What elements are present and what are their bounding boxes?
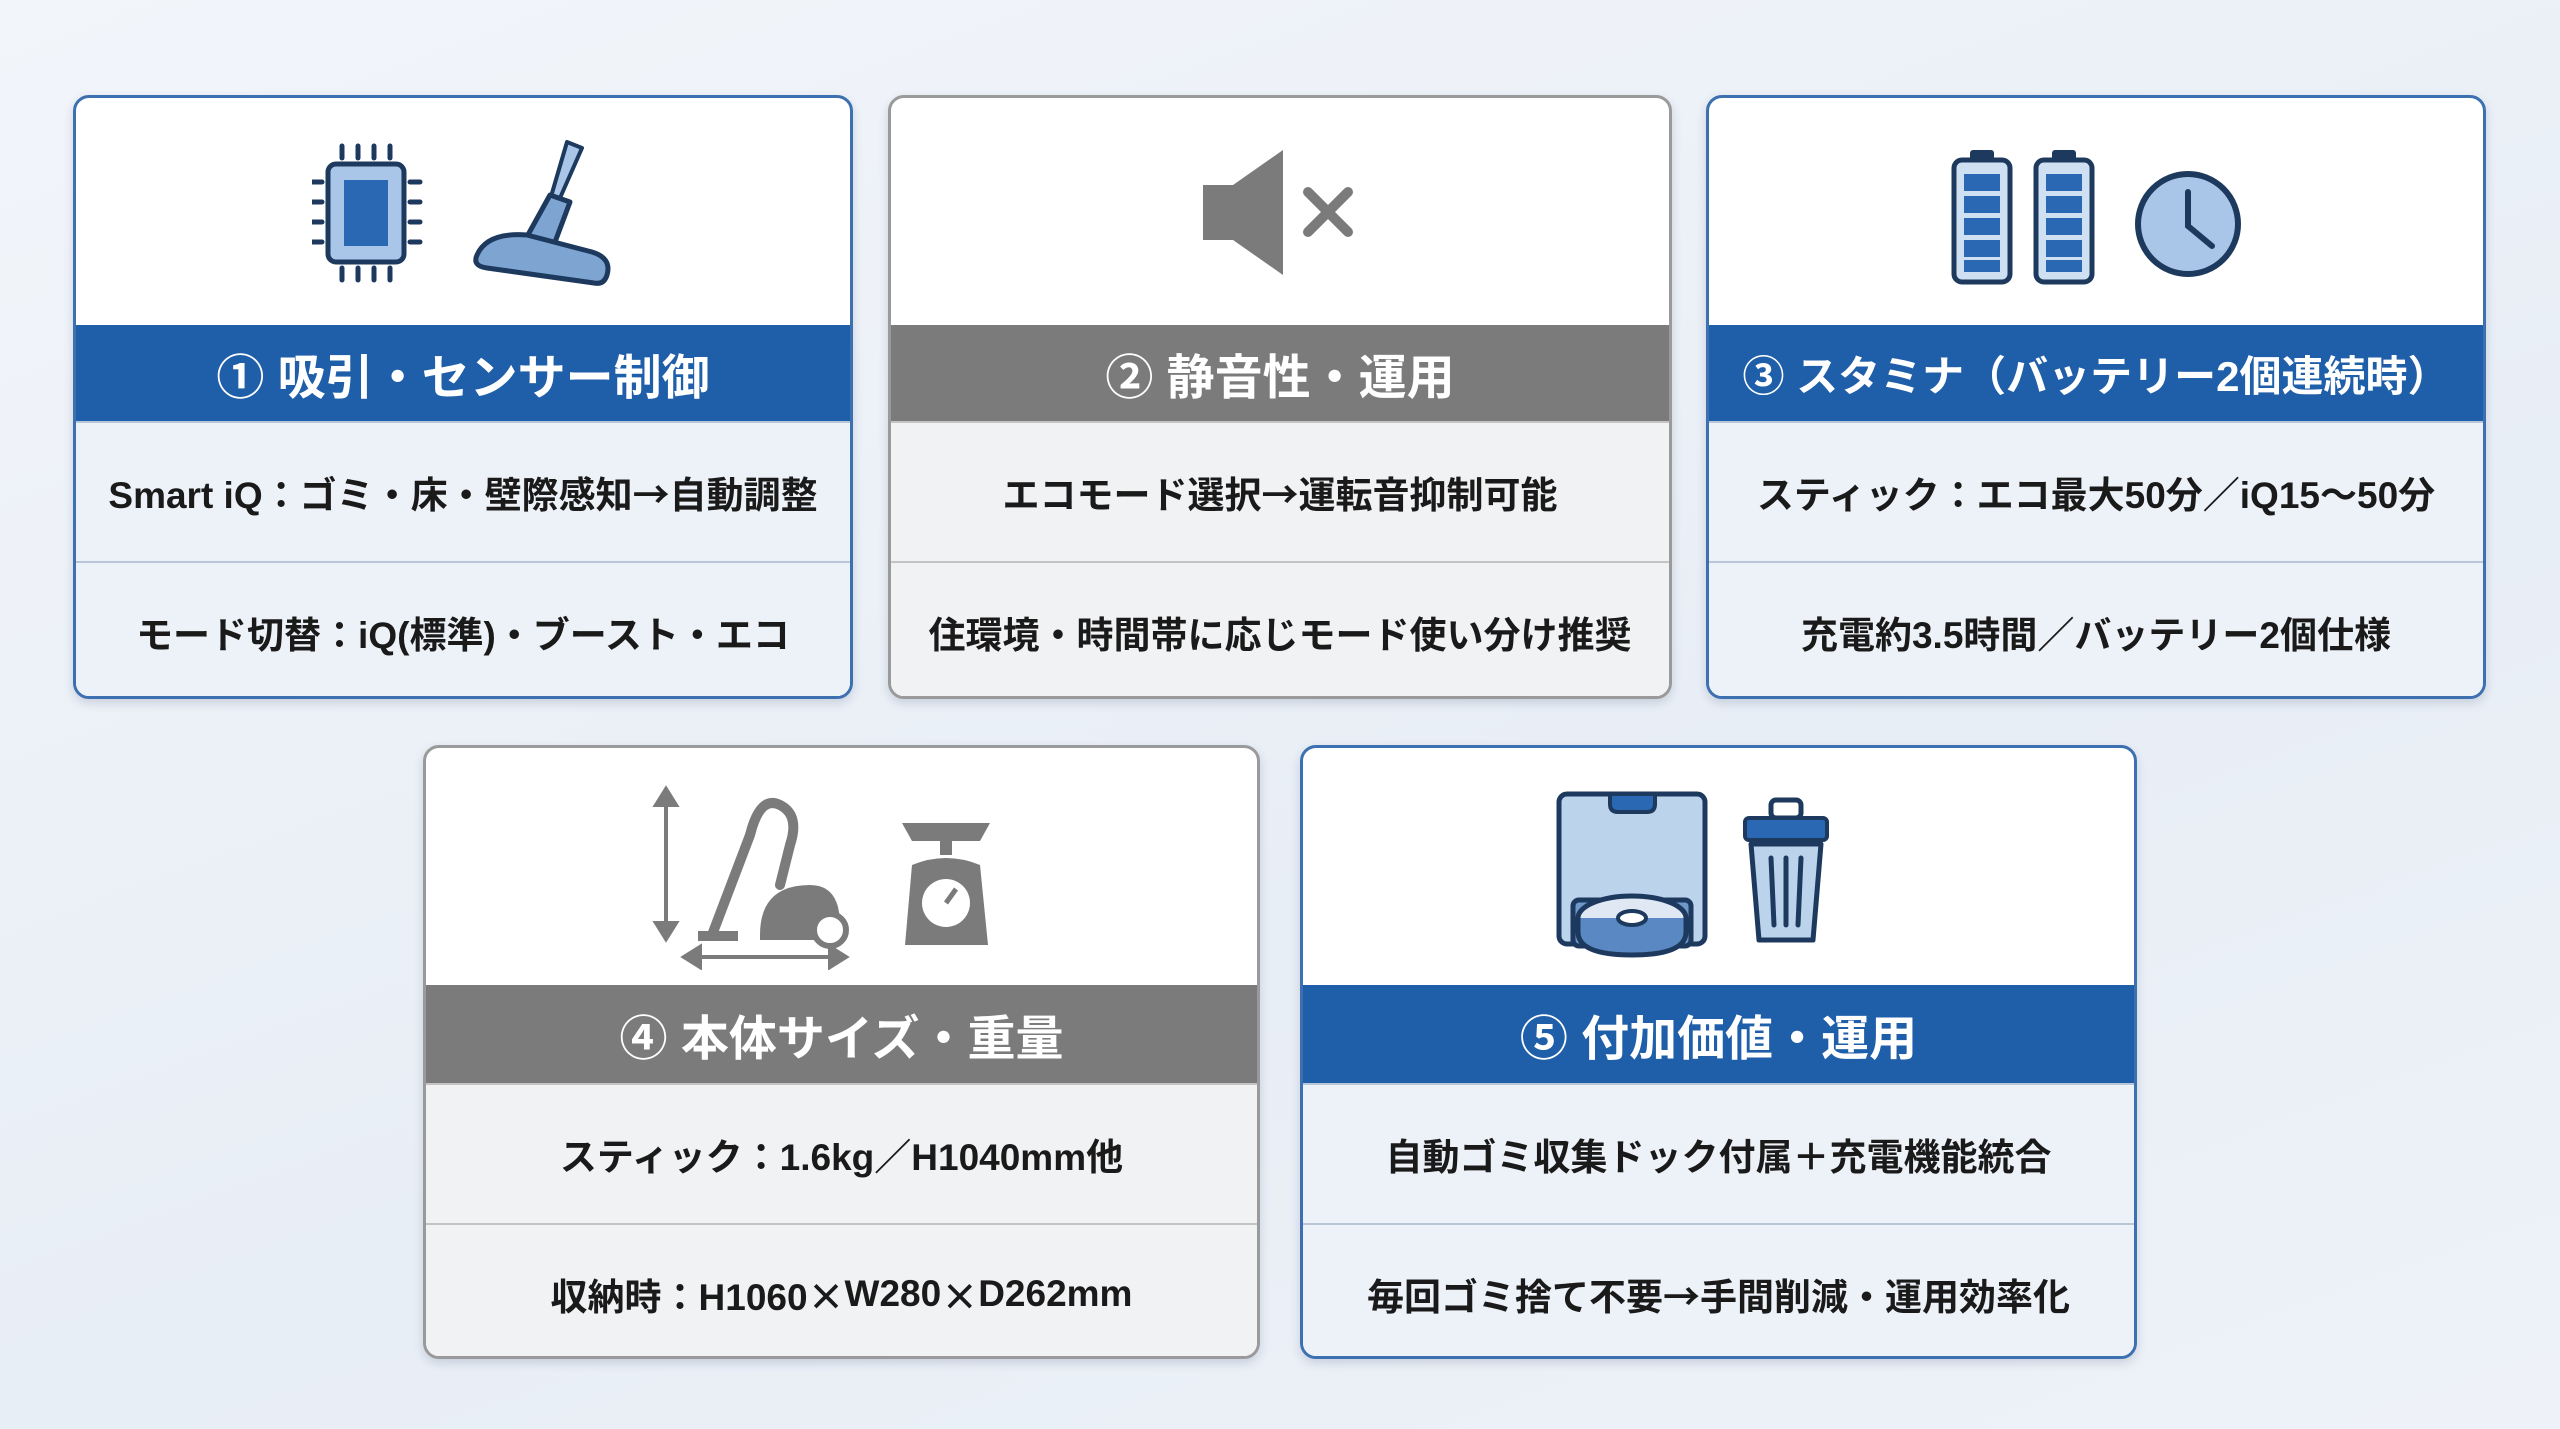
text: efficiency: 毎回ゴミ捨て不要 手間削減・運用効率化 — [1367, 1277, 2070, 1318]
header: stamina — [1709, 325, 2483, 421]
text: smart iQ: Smart iQ：ゴミ・床・壁際感知 自動調整 — [108, 475, 818, 516]
panel: quietness — [888, 95, 1672, 699]
text: eco mode — [891, 421, 1669, 561]
header: added value: ⑤ 付加価値・運用 — [1520, 1013, 1917, 1066]
text: stick weight — [426, 1083, 1257, 1223]
text: environment — [891, 561, 1669, 701]
panel: stamina — [1706, 95, 2486, 699]
header: quietness — [891, 325, 1669, 421]
text: dock: 自動ゴミ収集ドック付属＋充電機能統合 — [1386, 1137, 2052, 1178]
text: eco mode: → — [1262, 465, 1298, 519]
text: stick runtime — [1709, 421, 2483, 561]
panel: size & weight — [423, 745, 1260, 1359]
text: dock — [1303, 1083, 2134, 1223]
text: stick weight: スティック：1.6kg／H1040mm他 — [560, 1137, 1123, 1178]
icon: chip and nozzle — [312, 140, 610, 286]
icon: muted speaker — [1203, 150, 1353, 275]
text: stick runtime: ～ — [2320, 465, 2357, 519]
icon: vacuum with dimensions and scale — [652, 785, 990, 970]
text: efficiency — [1303, 1223, 2134, 1363]
header: size: ④ 本体サイズ・重量 — [620, 1013, 1063, 1066]
text: charging — [1709, 561, 2483, 701]
header: suction — [76, 325, 850, 421]
text: storage size — [426, 1223, 1257, 1363]
header: size — [426, 985, 1257, 1083]
text: mode switch: モード切替：iQ(標準)・ブースト・エコ — [136, 615, 790, 656]
panel: added value — [1300, 745, 2137, 1359]
header: stamina: ③ スタミナ（バッテリー2個連続時） — [1742, 352, 2450, 400]
text: storage size: 収納時：H1060 W280 D262mm — [551, 1273, 1132, 1318]
text: mode switch — [76, 561, 850, 701]
text: storage size: × — [941, 1267, 978, 1321]
icon: batteries and clock — [1952, 150, 2241, 284]
header: added value — [1303, 985, 2134, 1083]
text: charging: 充電約3.5時間／バッテリー2個仕様 — [1801, 615, 2391, 656]
icon: dock and trash can — [1556, 792, 1829, 958]
text: storage size: × — [808, 1267, 845, 1321]
text: environment: 住環境・時間帯に応じモード使い分け推奨 — [928, 615, 1632, 656]
text: stick runtime: スティック：エコ最大50分／iQ15 50分 — [1757, 475, 2435, 516]
panel: suction & sensor control — [73, 95, 853, 699]
header: quietness: ② 静音性・運用 — [1105, 352, 1455, 405]
text: efficiency: → — [1663, 1267, 1700, 1321]
text: eco mode: エコモード選択 運転音抑制可能 — [1002, 475, 1558, 516]
text: smart iQ — [76, 421, 850, 561]
text: smart iQ: → — [633, 465, 670, 519]
header: suction: ① 吸引・センサー制御 — [216, 352, 710, 405]
